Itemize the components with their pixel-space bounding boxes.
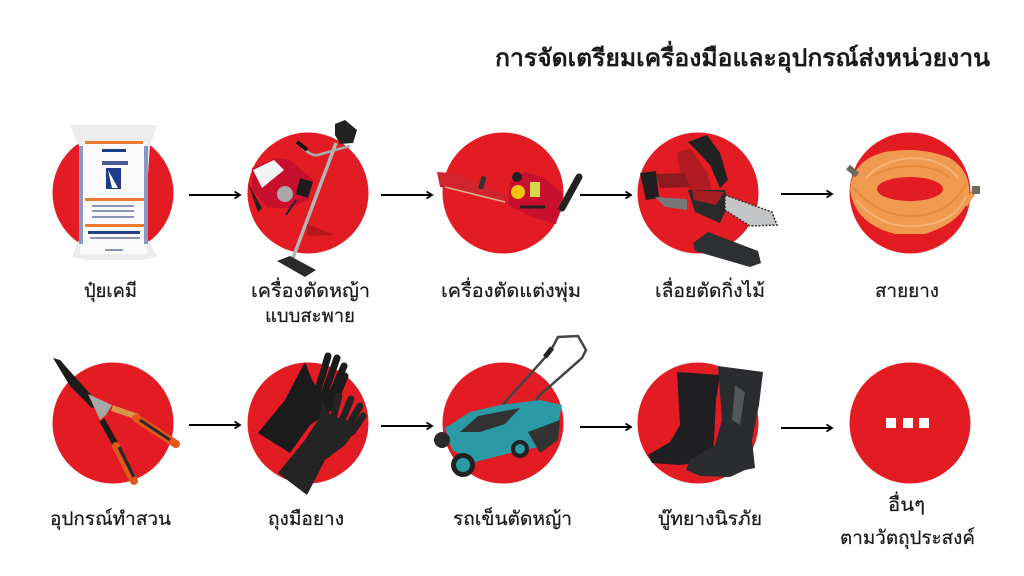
red circle [248, 132, 368, 254]
label: แบบสะพาย [265, 306, 355, 327]
label: อุปกรณ์ทำสวน [50, 508, 171, 531]
item: safety boots [638, 362, 763, 530]
red circle [442, 362, 564, 484]
red circle [638, 132, 758, 254]
icon: pruning saw [640, 135, 777, 267]
icon: hedge shears [53, 358, 176, 481]
label: ถุงมือยาง [268, 509, 344, 531]
label [251, 277, 370, 327]
red circle [52, 132, 174, 254]
arrow [381, 425, 432, 427]
label [840, 491, 975, 550]
icon: rubber gloves [258, 356, 363, 495]
label: เครื่องตัดแต่งพุ่ม [441, 277, 581, 303]
label: สายยาง [875, 281, 939, 302]
title: การจัดเตรียมเครื่องมือและอุปกรณ์ส่งหน่วยงาน [495, 40, 991, 74]
arrow [189, 194, 240, 196]
icon: hedge trimmer [437, 172, 579, 224]
label: ตามวัตถุประสงค์ [840, 527, 975, 550]
item: fertilizer [52, 125, 174, 303]
red circle [850, 132, 970, 254]
label: ปุ๋ยเคมี [84, 280, 137, 303]
icon: hose coil [848, 150, 980, 234]
item: lawn mower [434, 336, 586, 530]
label: อื่นๆ [888, 491, 925, 516]
icon: fertilizer bag [70, 125, 157, 260]
label: บู๊ทยางนิรภัย [658, 508, 762, 530]
item: others [840, 362, 975, 550]
arrow [381, 194, 432, 196]
arrow [580, 194, 631, 196]
arrow [189, 424, 240, 426]
item: hedge trimmer [437, 132, 581, 303]
item: hedge shears [50, 358, 176, 531]
icon: three dots [886, 418, 929, 428]
item: rubber gloves [248, 356, 368, 531]
red circle [442, 132, 564, 254]
arrow [781, 193, 832, 195]
icon: brush cutter [248, 120, 357, 277]
item: hose [848, 132, 980, 302]
red circle [248, 362, 368, 484]
red circle [52, 362, 174, 484]
label: เครื่องตัดหญ้า [251, 277, 370, 302]
item: brush cutter [248, 120, 370, 327]
red circle [638, 362, 758, 484]
label: เลื่อยตัดกิ่งไม้ [655, 277, 765, 302]
arrow [781, 427, 832, 429]
arrow [580, 426, 631, 428]
item: pruning saw [638, 132, 777, 302]
label: รถเข็นตัดหญ้า [453, 506, 572, 530]
icon: lawn mower [434, 336, 586, 477]
icon: safety boots [648, 366, 763, 477]
red circle [850, 362, 970, 484]
